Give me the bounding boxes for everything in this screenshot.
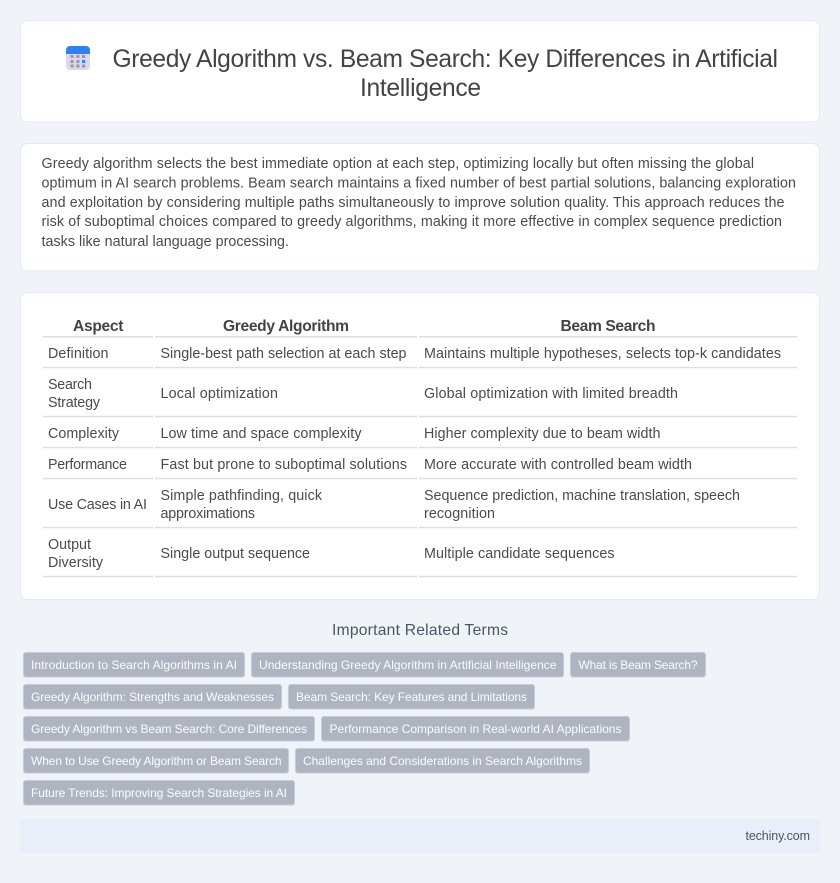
row: use cases: Sequence prediction, machine translation, speech [424, 488, 740, 504]
tag [24, 780, 294, 805]
row: search strategy [48, 377, 678, 411]
tag [252, 652, 564, 677]
text block: description: Greedy algorithm selects the best immediate option at each step, optimizing locally but often missing the global [42, 156, 754, 172]
tag: Greedy Algorithm: Strengths and Weaknesses [31, 690, 274, 704]
icon: calendar [66, 46, 90, 70]
table header: Aspect [73, 318, 124, 335]
panel: description [20, 144, 820, 271]
row: search strategy: Strategy [48, 395, 101, 411]
panel: comparison table [20, 292, 820, 600]
row: performance: More accurate with controlled beam width [424, 457, 692, 473]
tag [322, 716, 630, 741]
tag: Future Trends: Improving Search Strategies in AI [31, 786, 287, 800]
table header: Beam Search [560, 318, 656, 335]
row: output diversity [48, 537, 614, 571]
table header [73, 318, 656, 335]
tag [296, 748, 590, 773]
row: output diversity: Diversity [48, 555, 104, 571]
text block: description: optimum in AI search problems. Beam search maintains a fixed number of best partial solutions, balancing exploration [42, 176, 796, 192]
tag: Introduction to Search Algorithms in AI [31, 658, 237, 672]
tags: related terms [24, 652, 706, 805]
title: Greedy Algorithm vs. Beam Search: Key Differences in Artificial [112, 46, 778, 73]
row: performance: Fast but prone to suboptimal solutions [160, 457, 407, 473]
tag: Understanding Greedy Algorithm in Artificial Intelligence [259, 658, 557, 672]
footer: techiny.com [746, 829, 810, 843]
tag [570, 652, 706, 677]
row: use cases: Use Cases in AI [48, 497, 147, 513]
table header: Greedy Algorithm [223, 318, 349, 335]
row: use cases: recognition [424, 506, 495, 522]
row: output diversity: Single output sequence [160, 546, 310, 562]
text block: description: and exploitation by considering multiple paths simultaneously to improve solution quality. This approach reduces the [42, 195, 785, 211]
tag: Performance Comparison in Real-world AI Applications [330, 722, 622, 736]
footer [20, 819, 820, 853]
row: search strategy: Global optimization with limited breadth [424, 386, 678, 402]
row: definition [48, 346, 781, 362]
row: complexity: Complexity [48, 426, 120, 442]
row: performance [48, 457, 692, 473]
tag: What is Beam Search? [578, 658, 698, 672]
text block: description [42, 156, 796, 250]
text block: description: tasks like natural language processing. [42, 234, 289, 250]
panel: header [20, 20, 820, 122]
row: use cases [48, 488, 740, 522]
title [112, 46, 778, 102]
tag [24, 716, 314, 741]
row: output diversity: Multiple candidate sequences [424, 546, 614, 562]
heading: related terms: Important Related Terms [332, 622, 508, 639]
row: search strategy: Search [48, 377, 92, 393]
row: use cases: approximations [160, 506, 255, 522]
row: definition: Single-best path selection at each step [160, 346, 407, 362]
row: use cases: Simple pathfinding, quick [160, 488, 323, 504]
tag: Challenges and Considerations in Search Algorithms [303, 754, 582, 768]
row: complexity [48, 426, 661, 442]
row: complexity: Higher complexity due to beam width [424, 426, 661, 442]
text block: description: risk of suboptimal choices compared to greedy algorithms, making it more effective in complex sequence prediction [42, 214, 782, 230]
tag: Greedy Algorithm vs Beam Search: Core Differences [31, 722, 307, 736]
title: Intelligence [360, 75, 481, 102]
tag [288, 684, 534, 709]
row: search strategy: Local optimization [160, 386, 278, 402]
tag [24, 748, 288, 773]
row: definition: Maintains multiple hypotheses, selects top-k candidates [424, 346, 781, 362]
row: complexity: Low time and space complexity [160, 426, 362, 442]
tag [24, 684, 282, 709]
tag: Beam Search: Key Features and Limitations [296, 690, 527, 704]
row: performance: Performance [48, 457, 127, 473]
row: definition: Definition [48, 346, 109, 362]
tag [24, 652, 244, 677]
tag: When to Use Greedy Algorithm or Beam Search [31, 754, 282, 768]
row: output diversity: Output [48, 537, 91, 553]
